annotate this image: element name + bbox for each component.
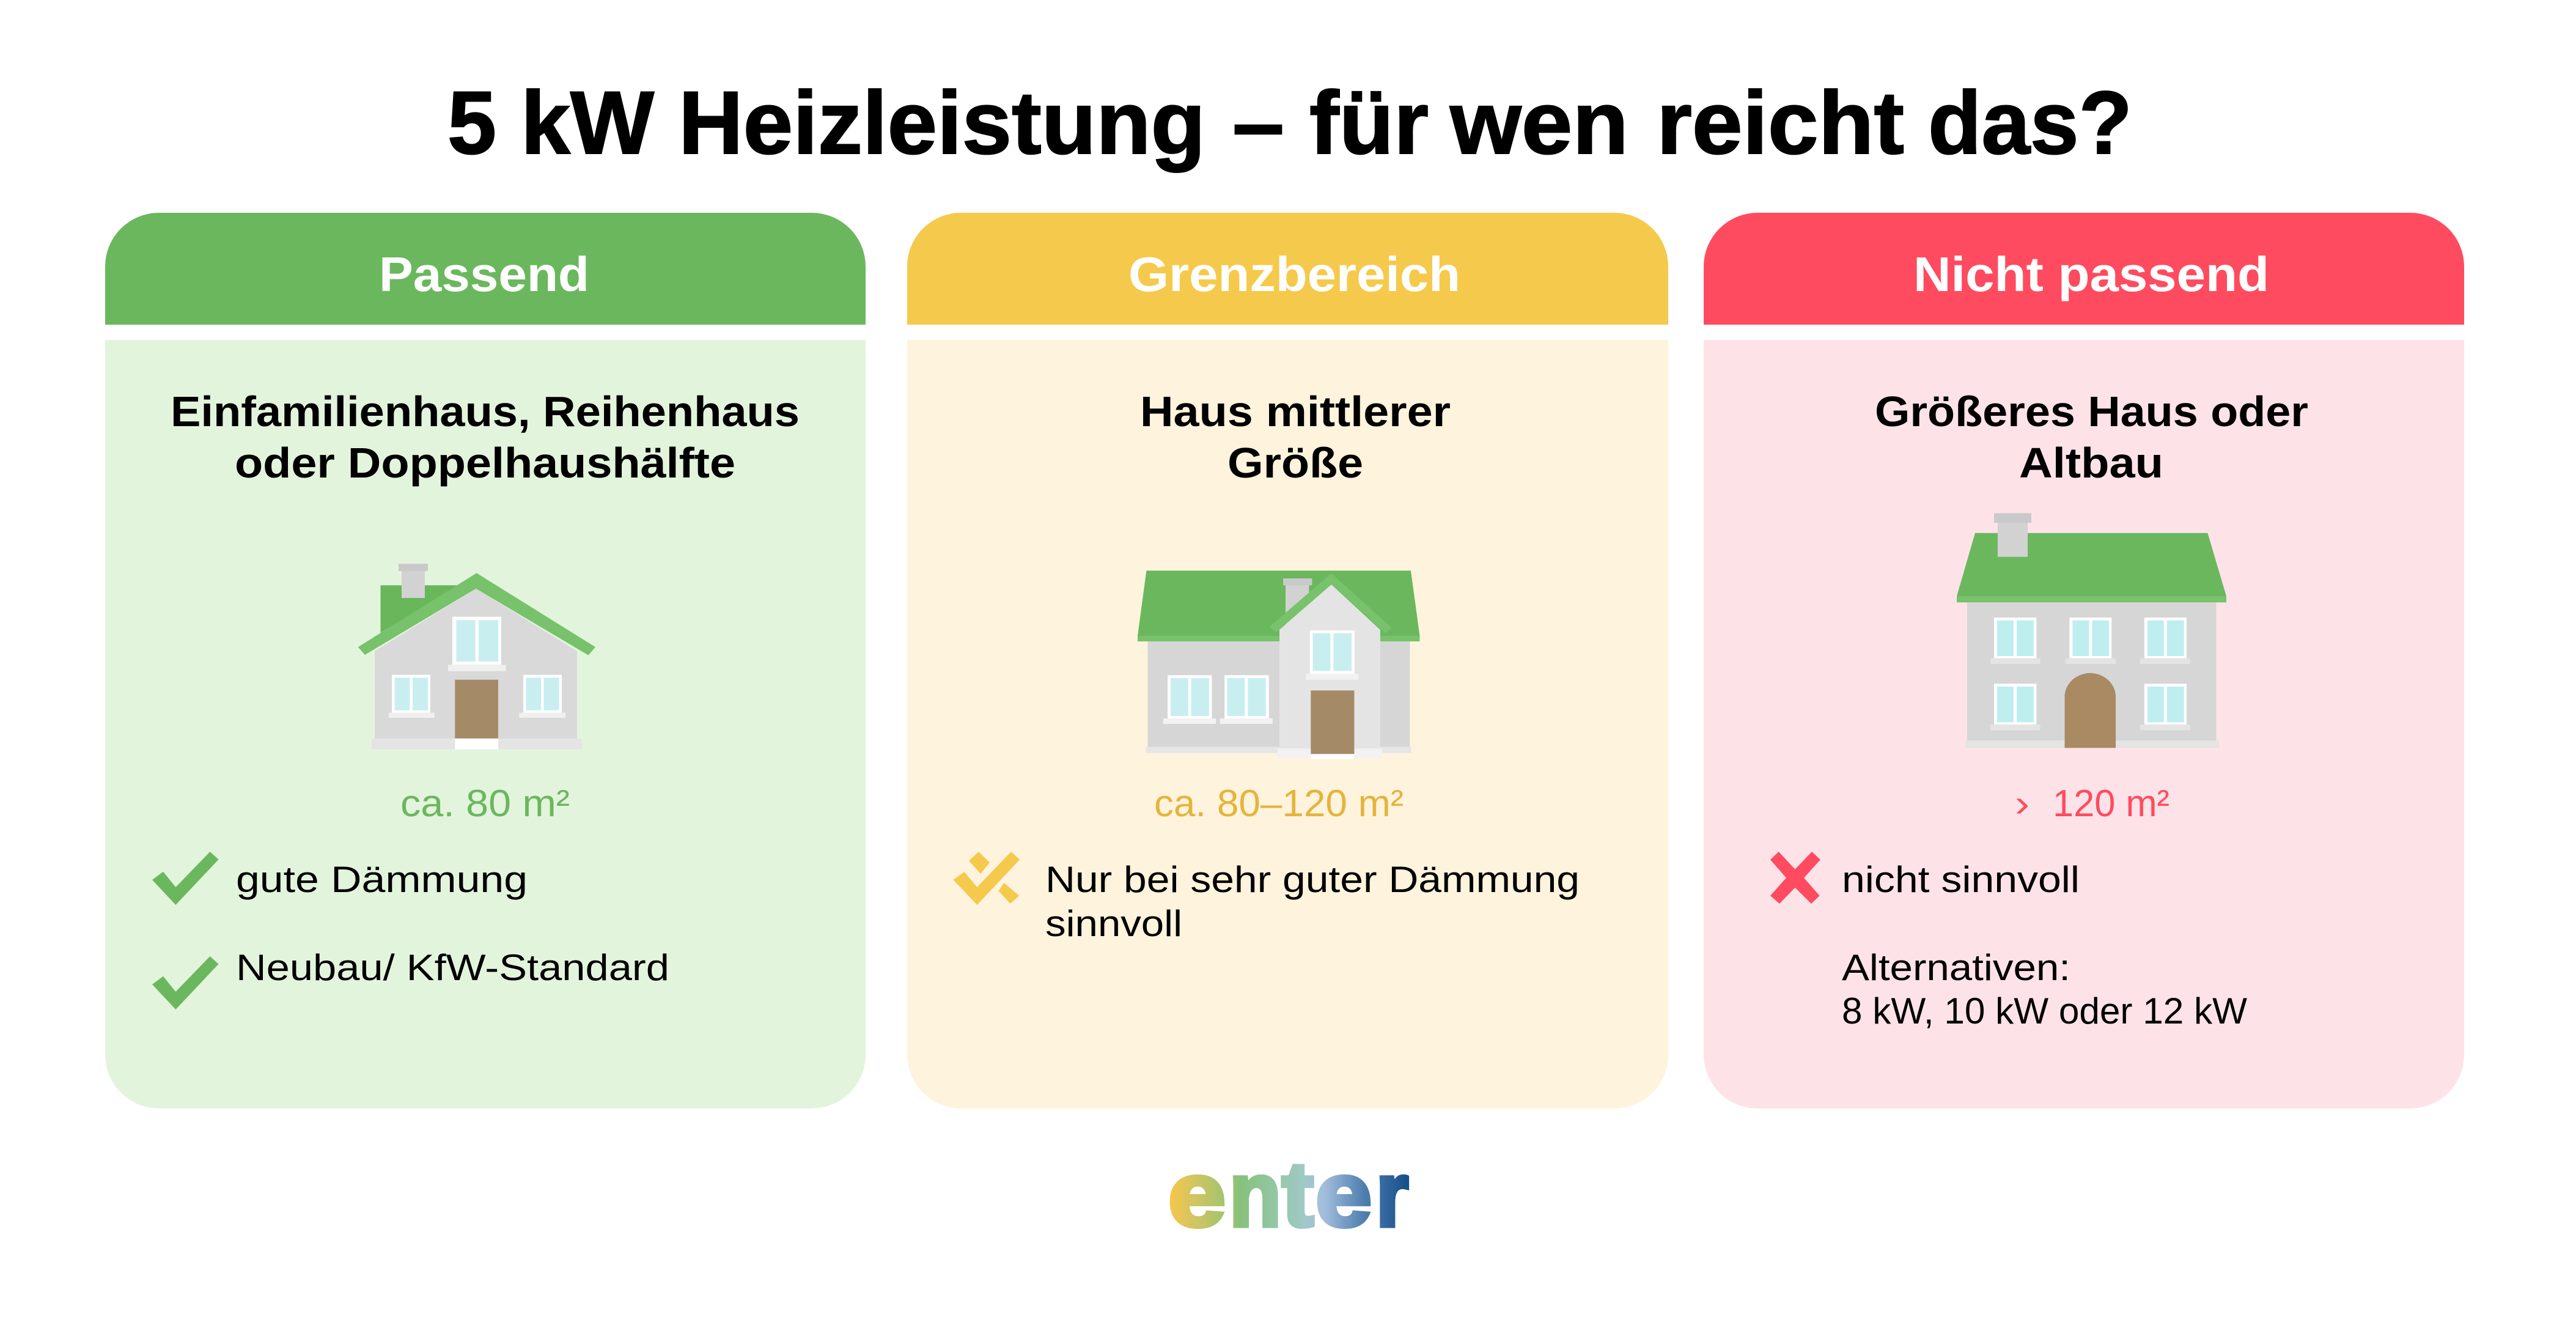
subheading: Größeres Haus oder Altbau: Größeres Haus oder [1875,388,2308,435]
logo: enter: r [1376,1143,1408,1245]
panel: Grenzbereich [907,213,1668,1109]
header: Nicht passend [1704,213,2464,325]
title: – [1232,73,1284,172]
subheading: Einfamilienhaus [171,388,800,487]
list item: gute Dämmung: gute Dämmung [236,859,528,900]
panel body: Passend [105,340,866,1109]
subheading: Größeres Haus oder Altbau: Altbau [2019,439,2163,487]
text block: Alternativen [1842,947,2247,1031]
panel: Nicht passend [1704,213,2464,1109]
subheading: Größeres Haus oder Altbau [1875,388,2308,487]
subheading: Einfamilienhaus: oder Doppelhaushälfte [235,439,735,487]
list item: Nur bei sehr guter Dämmung sinnvoll [1045,859,1580,944]
list item: Nur bei sehr guter Dämmung sinnvoll: Nur bei sehr guter Dämmung [1045,859,1580,900]
logo: enter: n [1229,1143,1281,1245]
area label: > 120 m²: › [2015,783,2030,825]
icon: medium house [1138,570,1419,759]
subheading: Haus mittlerer Größe [1140,388,1451,487]
title: 5 [447,73,496,172]
icon: partial check mark [954,852,1020,905]
title: wen [1449,73,1628,172]
title: Heizleistung [679,73,1205,172]
panel body: Nicht passend [1704,340,2464,1109]
subheading: Einfamilienhaus: Einfamilienhaus, Reihenhaus [171,388,800,435]
subheading: Haus mittlerer Größe: Haus mittlerer [1140,388,1451,435]
title: für [1309,73,1429,172]
title: das? [1928,73,2132,172]
logo: enter: e [1168,1143,1226,1245]
header: Grenzbereich: Grenzbereich [1128,247,1460,301]
panel: Passend [105,213,866,1109]
panel body: Grenzbereich [907,340,1668,1109]
logo: enter: e [1316,1143,1372,1245]
icon: red cross [1770,852,1820,904]
list item: Nur bei sehr guter Dämmung sinnvoll: sinnvoll [1045,903,1182,944]
area label: ca. 80–120 m²: ca. 80–120 m² [1154,783,1404,825]
logo: enter: t [1282,1143,1314,1245]
title: reicht [1657,73,1904,172]
header: Nicht passend: Nicht passend [1913,247,2269,301]
header: Passend [105,213,866,325]
area label: ca. 80 m²: ca. 80 m² [400,783,570,825]
icon: large house [1957,513,2226,748]
list item: nicht sinnvoll: nicht sinnvoll [1842,859,2080,900]
text block: Alternativen: 8 kW, 10 kW oder 12 kW [1842,990,2247,1031]
header: Passend: Passend [379,247,589,301]
icon: check mark [152,852,219,905]
text block: Alternativen: Alternativen: [1842,947,2070,988]
icon: small house [358,564,595,750]
icon: check mark [152,956,219,1009]
list item: Neubau: Neubau/ KfW-Standard [236,947,669,988]
area label: > 120 m²: 120 m² [2053,783,2169,825]
title: kW [521,73,654,172]
header: Grenzbereich [907,213,1668,325]
subheading: Haus mittlerer Größe: Größe [1227,439,1363,487]
